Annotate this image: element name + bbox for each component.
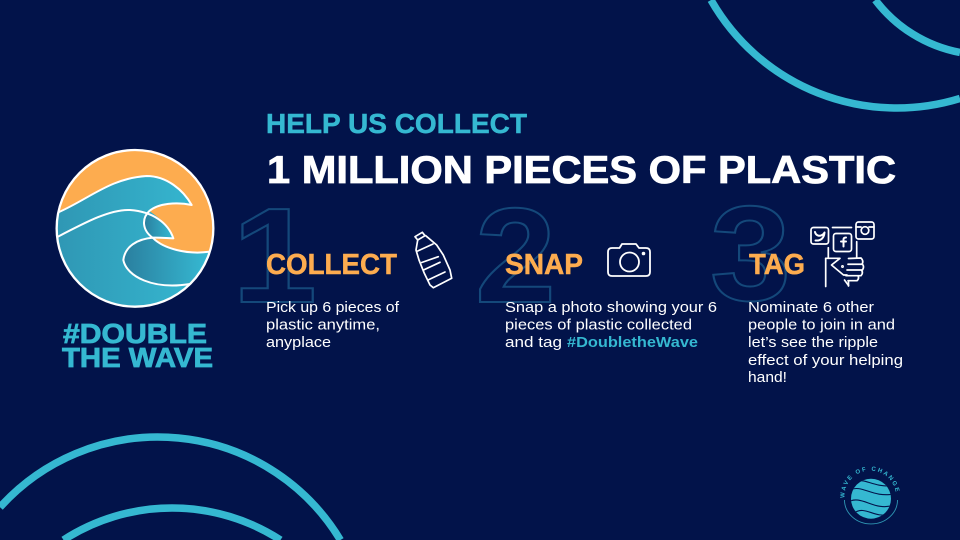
step 3 description: Nominate 6 other [748, 299, 874, 316]
step 1 description: anyplace [266, 334, 331, 351]
step 2 description: and tag [505, 334, 562, 351]
step 1 description: plastic anytime, [266, 316, 380, 334]
logo: Wave of Change [840, 466, 900, 524]
numeral 3 outline: 3 [710, 178, 791, 329]
step 2 description: Snap a photo showing your 6 [505, 299, 717, 316]
arc: bottom left large [0, 437, 340, 540]
icon: wave circle [56, 148, 214, 308]
icon: plastic bottle [415, 232, 452, 288]
step 3 description: people to join in and [748, 316, 895, 334]
arc: bottom left small [64, 508, 280, 540]
step 3 description [748, 299, 903, 386]
icon: globe with waves [851, 478, 891, 519]
icon: hand holding social media signs [811, 222, 874, 286]
step 2 description [505, 299, 717, 351]
panel: step 2 snap [475, 180, 717, 351]
step 3 description: effect of your helping [748, 352, 903, 369]
step heading: tag: TAG [749, 249, 805, 281]
logo text: #DOUBLE: #DOUBLE [63, 318, 207, 349]
step 2 description: pieces of plastic collected [505, 316, 692, 334]
step 3 description: let’s see the ripple [748, 334, 878, 351]
step 3 description: hand! [748, 369, 787, 386]
step 2 description: #DoubletheWave [567, 334, 698, 351]
icon: camera [608, 244, 650, 276]
panel: step 3 tag [710, 178, 903, 386]
logo: Double the Wave [56, 148, 214, 368]
lower ring [844, 500, 898, 524]
arc: top right small [875, 0, 960, 52]
step 1 description [266, 299, 400, 351]
wordmark: wave of change: WAVE OF CHANGE [840, 466, 900, 498]
logo text: THE WAVE: THE WAVE [62, 342, 213, 373]
step heading: collect: COLLECT [266, 249, 397, 281]
numeral 1 outline: 1 [232, 180, 317, 331]
numeral 2 outline: 2 [475, 180, 556, 331]
step heading: snap: SNAP [505, 249, 583, 281]
heading: help us collect: HELP US COLLECT [266, 108, 527, 139]
heading: 1 million pieces of plastic: 1 MILLION PIECES OF PLASTIC [267, 149, 896, 192]
step 1 description: Pick up 6 pieces of [266, 299, 400, 316]
arc: top right large [711, 0, 960, 108]
panel: step 1 collect [232, 180, 452, 351]
